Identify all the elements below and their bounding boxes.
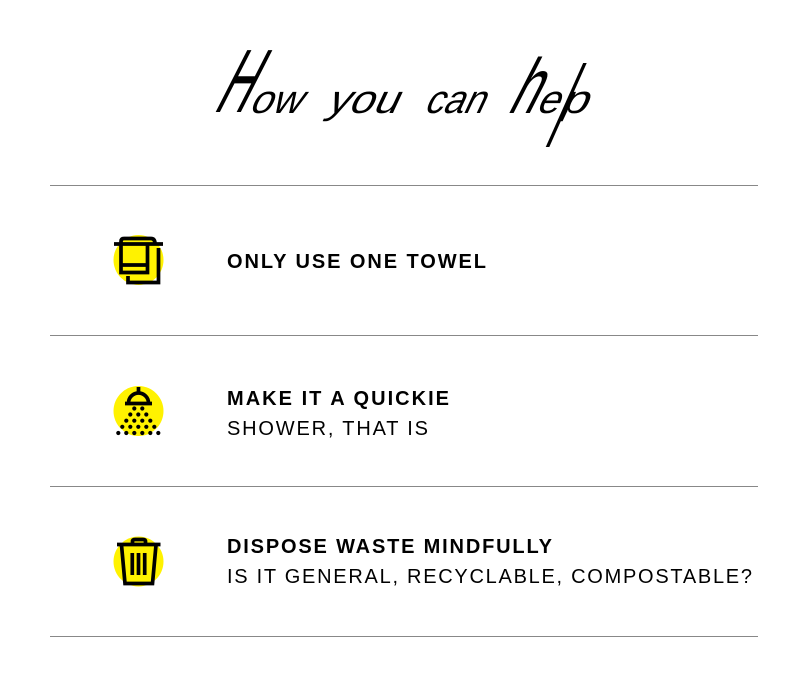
title: can: [419, 77, 499, 122]
title: H: [202, 30, 286, 132]
title: h: [498, 42, 569, 130]
heading: only use one towel: ONLY USE ONE TOWEL: [227, 251, 486, 273]
icon: towel: [114, 235, 164, 285]
title: [202, 30, 603, 172]
text: shower, that is: SHOWER, THAT IS: [227, 418, 428, 440]
icon: shower: [114, 386, 164, 436]
title: ow: [244, 77, 317, 122]
icon: trash bin: [114, 536, 164, 586]
text: is it general, recyclable, compostable?: IS IT GENERAL, RECYCLABLE, COMPOSTABLE?: [227, 566, 752, 588]
panel: waste tip: [114, 536, 752, 588]
heading: dispose waste mindfully: DISPOSE WASTE MINDFULLY: [227, 536, 553, 558]
title: e: [531, 77, 574, 122]
title: p: [555, 77, 603, 122]
heading: make it a quickie: MAKE IT A QUICKIE: [227, 388, 449, 410]
title: you: [321, 78, 412, 122]
title: l: [532, 42, 599, 172]
panel: towel tip: [114, 235, 486, 285]
panel: shower tip: [114, 386, 449, 440]
